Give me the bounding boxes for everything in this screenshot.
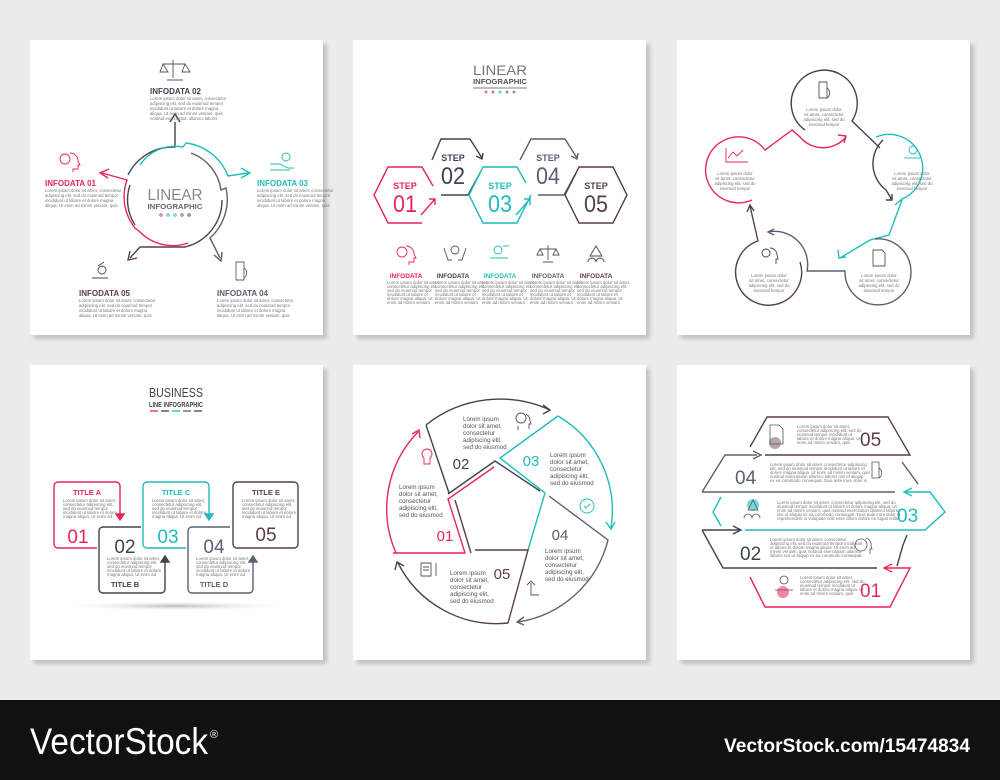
card backgrounds	[30, 40, 970, 660]
panel: card 5 pentagon cycle: 01	[437, 528, 453, 545]
infodata 02: nostrud exercitation ullamco laboris	[150, 116, 217, 121]
infodata 01: incididunt ut labore et dolore magna	[45, 198, 114, 203]
panel: card 4 business boxes: sed do eiusmod tempor	[63, 506, 108, 511]
infodata 03	[257, 153, 334, 208]
panel: card 2 linear steps: enim ad minim veniam	[435, 300, 478, 305]
panel: card 2 linear steps: enim ad minim veniam	[530, 300, 573, 305]
panel: card 2 linear steps: consectetur adipiscing elit,	[530, 284, 580, 289]
panel: card 3 circle cycle: sit amet, consectetur	[749, 278, 789, 283]
panel: card 5 pentagon cycle: Lorem ipsum	[545, 548, 581, 555]
panel: card 3 circle cycle: adipiscing elit, sed do	[748, 283, 790, 288]
infodata 01	[45, 153, 122, 208]
panel: card 6 hexagon bands: labore et dolore magna aliqua. Ut	[800, 587, 864, 592]
panel: card 4 business boxes: Lorem ipsum dolor sit amet,	[196, 556, 249, 561]
panel: card 4 business boxes: magna aliqua. Ut enim ad	[196, 572, 246, 577]
panel: card 5 pentagon cycle: dolor sit amet,	[399, 491, 438, 498]
panel: card 3 circle cycle: sit amet, consectetur	[859, 278, 899, 283]
panel: card 5 pentagon cycle: adipiscing elit,	[399, 505, 438, 512]
panel: card 5 pentagon cycle: Lorem ipsum	[450, 570, 486, 577]
panel: card 2 linear steps: STEP	[584, 181, 608, 191]
panel: card 6 hexagon bands: ut labore et dolore magna aliqua. Ut enim ad	[770, 545, 855, 550]
panel: card 4 business boxes: 02	[114, 537, 136, 558]
infodata 03: Lorem ipsum dolor sit amet, consectetur	[257, 188, 334, 193]
infodata 04: incididunt ut labore et dolore magna	[217, 308, 286, 313]
panel: card 6 hexagon bands: nisi ut aliquip ex ea commodo consequat. Duis aute irure dolor in	[777, 512, 901, 517]
panel: card 5 pentagon cycle: adipiscing elit,	[463, 437, 502, 444]
panel: card 2 linear steps: dolore magna aliqua. Ut	[435, 296, 481, 301]
panel: card 4 business boxes: Lorem ipsum dolor sit amet,	[242, 498, 295, 503]
infodata 05: INFODATA 05	[79, 289, 131, 298]
panel: card 3 circle cycle: sit amet, consectetur	[804, 112, 844, 117]
panel: card 2 linear steps: Lorem ipsum dolor sit amet,	[435, 280, 488, 285]
panel: card 5 pentagon cycle: consectetur	[399, 498, 431, 505]
panel: card 2 linear steps	[374, 62, 630, 305]
title card 2	[473, 62, 527, 93]
panel: card 4 business boxes: sed do eiusmod tempor	[152, 506, 197, 511]
panel: card 2 linear steps: Lorem ipsum dolor sit amet,	[482, 280, 535, 285]
panel: card 2 linear steps: incididunt ut labore et	[482, 292, 524, 297]
panel: card 2 linear steps: INFODATA	[484, 273, 517, 280]
panel: card 4 business boxes: consectetur adipiscing elit,	[196, 560, 246, 565]
panel: card 4 business boxes: incididunt ut labore et dolore	[242, 510, 297, 515]
panel: card 4 business boxes: magna aliqua. Ut enim ad	[242, 514, 292, 519]
panel: card 4 business boxes: TITLE E	[252, 488, 280, 497]
panel: card 5 pentagon cycle: Lorem ipsum	[550, 452, 586, 459]
infodata 05: Lorem ipsum dolor sit amet, consectetur	[79, 298, 156, 303]
panel: card 3 circle cycle: sit amet, consectetur	[715, 176, 755, 181]
panel: card 2 linear steps: dolore magna aliqua. Ut	[387, 296, 433, 301]
panel: card 4 business boxes: 03	[157, 527, 179, 548]
panel: card 6 hexagon bands: 02	[740, 544, 761, 565]
panel: card 3 circle cycle: eiusmod tempor	[864, 288, 895, 293]
panel: card 2 linear steps: 05	[584, 191, 608, 218]
panel: card 2 linear steps: 03	[488, 191, 512, 218]
infodata 02	[150, 60, 227, 121]
title card 4	[149, 385, 203, 411]
panel: card 6 hexagon bands: enim ad minim veniam, quis	[800, 591, 853, 596]
panel: card 5 pentagon cycle: consectetur	[450, 584, 482, 591]
infodata 01: Lorem ipsum dolor sit amet, consectetur	[45, 188, 122, 193]
panel: card 5 pentagon cycle: Lorem ipsum	[399, 484, 435, 491]
panel: card 6 hexagon bands: 04	[735, 468, 757, 489]
panel: card 3 circle cycle: Lorem ipsum dolor	[894, 171, 930, 176]
infodata 03: INFODATA 03	[257, 179, 309, 188]
panel: card 4 business boxes: sed do eiusmod tempor	[196, 564, 241, 569]
panel: card 2 linear steps: 02	[441, 163, 465, 190]
panel: card 2 linear steps: dolore magna aliqua. Ut	[530, 296, 576, 301]
panel: card 5 pentagon cycle: sed do eiusmod	[399, 512, 443, 519]
panel: card 2 linear steps: Lorem ipsum dolor sit amet,	[530, 280, 583, 285]
panel: card 6 hexagon bands: eiusmod tempor incididunt ut	[800, 583, 856, 588]
panel: card 5 pentagon cycle: sed do eiusmod	[545, 576, 589, 583]
panel: card 3 circle cycle: Lorem ipsum dolor	[751, 273, 787, 278]
panel: card 3 circle cycle: adipiscing elit, sed do	[803, 117, 845, 122]
infodata 04: aliqua. Ut enim ad minim veniam, quis	[217, 313, 290, 318]
panel: card 3 circle cycle: Lorem ipsum dolor	[861, 273, 897, 278]
footer bar	[0, 700, 1000, 780]
panel: card 6 hexagon bands: dolore magna aliqua. Ut enim ad minim veniam, quis	[770, 470, 870, 475]
infodata 01: INFODATA 01	[45, 179, 97, 188]
infodata 04: INFODATA 04	[217, 289, 269, 298]
hexagons	[374, 139, 627, 223]
panel: card 2 linear steps: consectetur adipiscing elit,	[577, 284, 627, 289]
panel: card 6 hexagon bands: enim ad minim veniam, quis nostrud exercitation ullamco laboris	[777, 508, 899, 513]
title card 4: BUSINESS	[149, 385, 203, 400]
panel: card 3 circle cycle: adipiscing elit, sed do	[858, 283, 900, 288]
panel: card 2 linear steps: INFODATA	[437, 273, 470, 280]
panel: card 4 business boxes	[54, 385, 298, 611]
panel: card 4 business boxes: TITLE A	[73, 488, 102, 497]
step icons and infodata	[397, 245, 604, 265]
panel: card 4 business boxes: incididunt ut labore et dolore	[63, 510, 118, 515]
infodata 04: adipiscing elit, sed do eiusmod tempor	[217, 303, 291, 308]
panel: card 2 linear steps: Lorem ipsum dolor sit amet,	[387, 280, 440, 285]
panel: card 4 business boxes: Lorem ipsum dolor sit amet,	[63, 498, 116, 503]
panel: card 2 linear steps: sed do eiusmod tempor	[530, 288, 575, 293]
panel: card 4 business boxes: sed do eiusmod tempor	[242, 506, 287, 511]
footer bar: VectorStock	[30, 721, 208, 762]
panel: card 5 pentagon cycle: adipiscing elit,	[450, 591, 489, 598]
title card 2: INFOGRAPHIC	[473, 79, 527, 86]
panel: card 5 pentagon cycle: consectetur	[463, 430, 495, 437]
panel: card 4 business boxes: sed do eiusmod tempor	[107, 564, 152, 569]
panel: card 2 linear steps: INFODATA	[580, 273, 613, 280]
panel: card 2 linear steps: 04	[536, 163, 560, 190]
panel: card 4 business boxes: Lorem ipsum dolor sit amet,	[107, 556, 160, 561]
panel: card 5 pentagon cycle: dolor sit amet,	[463, 423, 502, 430]
panel: card 3 circle cycle: Lorem ipsum dolor	[806, 107, 842, 112]
panel: card 5 pentagon cycle: 02	[453, 456, 469, 473]
infodata 03: adipiscing elit, sed do eiusmod tempor	[257, 193, 331, 198]
panel: card 3 circle cycle: eiusmod tempor	[809, 122, 840, 127]
panel: card 4 business boxes: 05	[255, 525, 277, 546]
panel: card 2 linear steps: incididunt ut labore et	[387, 292, 429, 297]
panel: card 6 hexagon bands: eiusmod tempor incididunt ut	[797, 432, 853, 437]
panel: card 2 linear steps: enim ad minim veniam	[482, 300, 525, 305]
panel: card 6 hexagon bands: minim veniam, quis nostrud exercitation ullamco	[770, 549, 862, 554]
panel: card 2 linear steps: sed do eiusmod tempor	[577, 288, 622, 293]
panel: card 3 circle cycle: eiusmod tempor	[897, 186, 928, 191]
panel: card 5 pentagon cycle: adipiscing elit,	[550, 473, 589, 480]
panel: card 6 hexagon bands: Lorem ipsum dolor sit amet,	[797, 424, 850, 429]
panel: card 2 linear steps: Lorem ipsum dolor sit amet,	[577, 280, 630, 285]
panel: card 3 circle cycle: adipiscing elit, sed do	[891, 181, 933, 186]
panel: card 6 hexagon bands: Lorem ipsum dolor sit amet,	[800, 575, 853, 580]
infodata 05: adipiscing elit, sed do eiusmod tempor	[79, 303, 153, 308]
panel: card 4 business boxes: incididunt ut labore et dolore	[152, 510, 207, 515]
panel: card 6 hexagon bands: ex ea commodo consequat. Duis aute irure dolor in	[770, 478, 868, 483]
panel: card 5 pentagon cycle: sed do eiusmod	[463, 444, 507, 451]
infodata 04	[217, 262, 294, 318]
panel: card 4 business boxes: consectetur adipiscing elit,	[152, 502, 202, 507]
panel: card 6 hexagon bands: elit, sed do eiusmod tempor incididunt ut labore et	[770, 466, 866, 471]
panel: card 6 hexagon bands: reprehenderit in voluptate velit esse cillum dolore eu fugiat nulla	[777, 516, 899, 521]
panel: card 3 circle cycle: eiusmod tempor	[720, 186, 751, 191]
panel: card 2 linear steps: dolore magna aliqua. Ut	[577, 296, 623, 301]
panel: card 5 pentagon cycle: adipiscing elit,	[545, 569, 584, 576]
panel: card 1 circular arrows	[100, 114, 250, 261]
panel: card 3 circle cycle: sit amet, consectetur	[892, 176, 932, 181]
panel: card 4 business boxes: 04	[203, 537, 225, 558]
center title card 1	[148, 187, 203, 216]
panel: card 4 business boxes: TITLE D	[200, 580, 229, 589]
panel: card 4 business boxes: magna aliqua. Ut enim ad	[107, 572, 157, 577]
panel: card 6 hexagon bands: 05	[860, 430, 881, 451]
panel: card 2 linear steps: STEP	[441, 153, 465, 163]
panel: card 3 circle cycle: eiusmod tempor	[754, 288, 785, 293]
panel: card 4 business boxes: magna aliqua. Ut enim ad	[152, 514, 202, 519]
infodata 03: incididunt ut labore et dolore magna	[257, 198, 326, 203]
infodata 05: aliqua. Ut enim ad minim veniam, quis	[79, 313, 152, 318]
panel: card 5 pentagon cycle: dolor sit amet,	[450, 577, 489, 584]
panel: card 6 hexagon bands: 01	[860, 581, 881, 602]
panel: card 6 hexagon bands: Lorem ipsum dolor sit amet, consectetur adipiscing	[770, 462, 867, 467]
panel: card 2 linear steps: incididunt ut labore et	[577, 292, 619, 297]
center title card 1: LINEAR	[148, 187, 202, 204]
infodata 04: Lorem ipsum dolor sit amet, consectetur	[217, 298, 294, 303]
panel: card 5 pentagon cycle	[387, 399, 615, 625]
panel: card 6 hexagon bands: Lorem ipsum dolor sit amet, consectetur adipiscing elit, sed do	[777, 500, 896, 505]
infodata 05: incididunt ut labore et dolore magna	[79, 308, 148, 313]
panel: card 6 hexagon bands: 03	[897, 506, 918, 527]
panel: card 5 pentagon cycle: 03	[523, 453, 539, 470]
panel: card 4 business boxes: Lorem ipsum dolor sit amet,	[152, 498, 205, 503]
panel: card 6 hexagon bands: labore et dolore magna aliqua. Ut	[797, 436, 861, 441]
panel: card 4 business boxes: 01	[67, 527, 89, 548]
infodata 02: Lorem ipsum dolor sit amet, consectetur	[150, 96, 227, 101]
panel: card 4 business boxes: incididunt ut labore et dolore	[196, 568, 251, 573]
center title card 1: INFOGRAPHIC	[148, 202, 203, 211]
panel: card 6 hexagon bands: laboris nisi ut aliquip ex ea commodo consequat.	[770, 553, 863, 558]
panel: card 6 hexagon bands: adipiscing elit, sed do eiusmod tempor incididunt	[770, 541, 863, 546]
panel: card 2 linear steps: dolore magna aliqua. Ut	[482, 296, 528, 301]
infodata 02: aliqua. Ut enim ad minim veniam, quis	[150, 111, 223, 116]
panel: card 2 linear steps: STEP	[488, 181, 512, 191]
panel: card 2 linear steps: sed do eiusmod tempor	[387, 288, 432, 293]
panel: card 5 pentagon cycle: dolor sit amet,	[545, 555, 584, 562]
panel: card 2 linear steps: consectetur adipiscing elit,	[387, 284, 437, 289]
panel: card 2 linear steps: enim ad minim veniam	[387, 300, 430, 305]
panel: card 5 pentagon cycle: consectetur	[545, 562, 577, 569]
panel: card 4 business boxes: consectetur adipiscing elit,	[107, 560, 157, 565]
infodata 02: incididunt ut labore et dolore magna	[150, 106, 219, 111]
infodata 02: INFODATA 02	[150, 87, 202, 96]
infodata 02: adipiscing elit, sed do eiusmod tempor	[150, 101, 224, 106]
panel: card 2 linear steps: INFODATA	[532, 273, 565, 280]
panel: card 4 business boxes: magna aliqua. Ut enim ad	[63, 514, 113, 519]
panel: card 2 linear steps: STEP	[536, 153, 560, 163]
footer bar: VectorStock.com/15474834	[724, 736, 970, 757]
panel: card 2 linear steps: sed do eiusmod tempor	[482, 288, 527, 293]
panel: card 5 pentagon cycle: dolor sit amet,	[550, 459, 589, 466]
panel: card 3 circle cycle: Lorem ipsum dolor	[717, 171, 753, 176]
panel: card 6 hexagon bands: nostrud exercitation ullamco laboris nisi ut aliquip	[770, 474, 864, 479]
panel: card 3 circle cycle: adipiscing elit, sed do	[714, 181, 756, 186]
panel: card 2 linear steps: 01	[393, 191, 417, 218]
panel: card 2 linear steps: sed do eiusmod tempor	[435, 288, 480, 293]
panel: card 5 pentagon cycle: 04	[552, 527, 568, 544]
title card 4: LINE INFOGRAPHIC	[149, 402, 203, 409]
panel: card 2 linear steps: enim ad minim veniam	[577, 300, 620, 305]
panel: card 5 pentagon cycle: Lorem ipsum	[463, 416, 499, 423]
panel: card 6 hexagon bands: consectetur adipiscing elit, sed do	[800, 579, 865, 584]
panel: card 3 circle cycle	[706, 70, 933, 305]
panel: card 5 pentagon cycle: sed do eiusmod	[450, 598, 494, 605]
panel: card 2 linear steps: STEP	[393, 181, 417, 191]
panel: card 6 hexagon bands: Lorem ipsum dolor sit amet, consectetur	[770, 537, 847, 542]
panel: card 2 linear steps: INFODATA	[390, 273, 423, 280]
infodata 01: adipiscing elit, sed do eiusmod tempor	[45, 193, 119, 198]
panel: card 4 business boxes: incididunt ut labore et dolore	[107, 568, 162, 573]
panel: card 6 hexagon bands	[702, 417, 945, 607]
panel: card 2 linear steps: consectetur adipiscing elit,	[482, 284, 532, 289]
panel: card 5 pentagon cycle: sed do eiusmod	[550, 480, 594, 487]
panel: card 6 hexagon bands: consectetur adipiscing elit, sed do	[797, 428, 862, 433]
panel: card 4 business boxes: TITLE B	[111, 580, 140, 589]
panel: card 2 linear steps: incididunt ut labore et	[530, 292, 572, 297]
panel: card 4 business boxes: consectetur adipiscing elit,	[63, 502, 113, 507]
panel: card 6 hexagon bands: enim ad minim veniam, quis	[797, 440, 850, 445]
panel: card 5 pentagon cycle: 05	[494, 566, 510, 583]
infodata 01: aliqua. Ut enim ad minim veniam, quis	[45, 203, 118, 208]
panel: card 5 pentagon cycle: consectetur	[550, 466, 582, 473]
infodata 03: aliqua. Ut enim ad minim veniam, quis	[257, 203, 330, 208]
panel: card 2 linear steps: consectetur adipiscing elit,	[435, 284, 485, 289]
panel: card 6 hexagon bands: eiusmod tempor incididunt ut labore et dolore magna aliqua. Ut	[777, 504, 897, 509]
title card 2: LINEAR	[473, 62, 527, 78]
panel: card 4 business boxes: consectetur adipiscing elit,	[242, 502, 292, 507]
panel: card 4 business boxes: TITLE C	[162, 488, 191, 497]
footer bar: ®	[210, 729, 218, 741]
infodata 05	[79, 262, 156, 318]
panel: card 2 linear steps: incididunt ut labore et	[435, 292, 477, 297]
circle arrows	[100, 114, 250, 261]
